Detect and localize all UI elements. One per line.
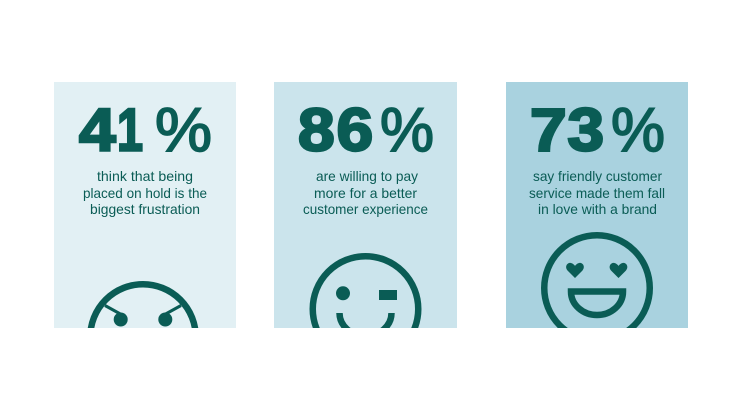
statistic: 86%: % bbox=[380, 96, 434, 165]
statistic: 86% bbox=[298, 96, 434, 165]
statistic: 41%: % bbox=[155, 96, 212, 165]
description text: more for a better bbox=[314, 185, 417, 201]
icon: winking face bbox=[310, 253, 422, 328]
statistic: 41%: 1 bbox=[117, 97, 143, 164]
description text: placed on hold is the bbox=[83, 185, 207, 201]
statistic: 73%: 73 bbox=[530, 97, 604, 164]
description text bbox=[529, 168, 665, 217]
statistic: 41%: 4 bbox=[79, 97, 116, 164]
description text: think that being bbox=[97, 168, 193, 184]
panel: 86% willing to pay more bbox=[274, 82, 457, 328]
description text: are willing to pay bbox=[316, 168, 418, 184]
statistic: 41% bbox=[79, 96, 212, 165]
description text: customer experience bbox=[303, 201, 428, 217]
description text: say friendly customer bbox=[533, 168, 662, 184]
statistic: 73%: % bbox=[611, 96, 665, 165]
description text: service made them fall bbox=[529, 185, 665, 201]
icon: heart-eyes smiling face bbox=[544, 235, 650, 341]
icon: angry face bbox=[88, 281, 198, 328]
statistic: 73% bbox=[530, 96, 665, 165]
panel: 73% fall in love with a brand bbox=[506, 82, 688, 341]
description text: in love with a brand bbox=[538, 201, 657, 217]
description text bbox=[83, 168, 207, 217]
description text: biggest frustration bbox=[90, 201, 200, 217]
statistic: 86%: 86 bbox=[298, 97, 373, 164]
description text bbox=[303, 168, 428, 217]
panel: 41% being placed on hold bbox=[54, 82, 236, 328]
